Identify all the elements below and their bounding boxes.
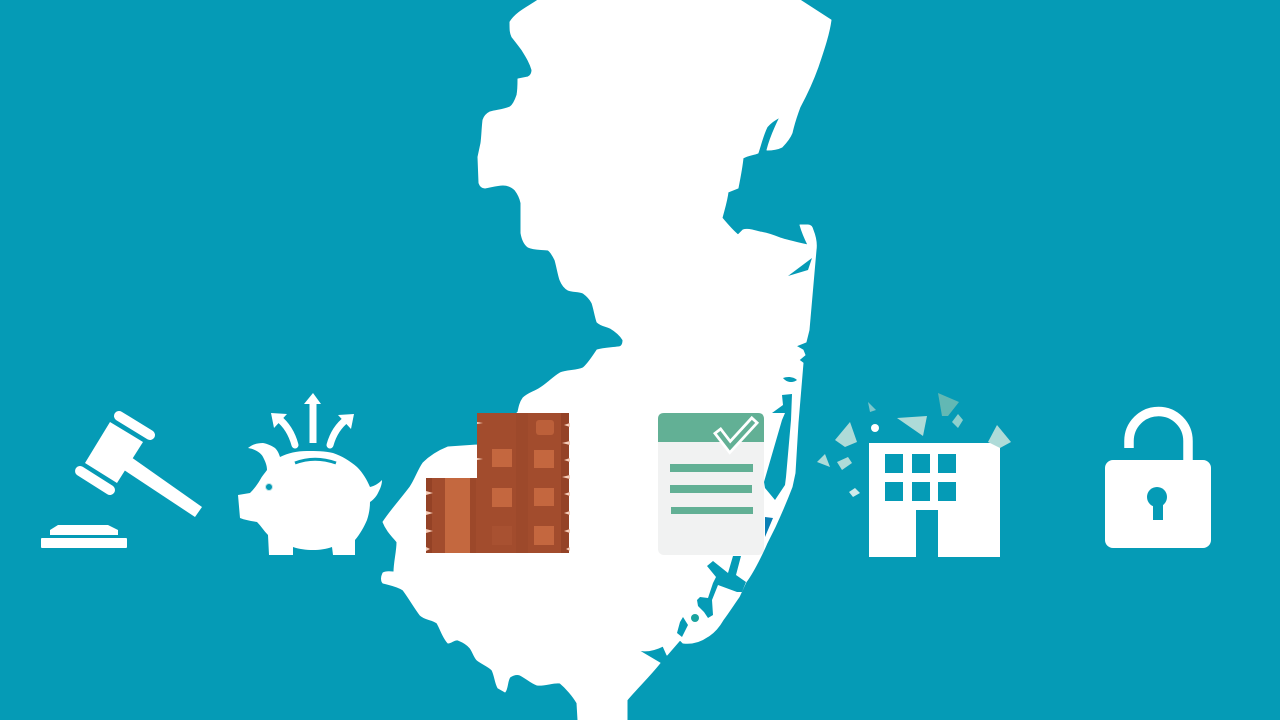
building dark edges	[426, 413, 569, 553]
icon: brick apartment building	[426, 413, 570, 553]
map inlet: marsh dot	[691, 614, 699, 622]
map: New Jersey	[382, 0, 831, 720]
icon: padlock	[1105, 412, 1211, 548]
building windows	[492, 420, 554, 545]
map inlet: small north bay	[783, 377, 797, 382]
piggy eye	[266, 484, 272, 490]
building shards	[817, 393, 1011, 497]
arrow: up	[304, 393, 321, 443]
arrow: up-right	[330, 414, 354, 445]
icon: checklist document	[658, 413, 764, 555]
piggy coin slot	[295, 459, 336, 463]
icon: crumbling building	[817, 393, 1011, 557]
padlock keyhole	[1147, 487, 1167, 520]
map inlet: Barnegat Bay	[764, 394, 792, 500]
map inlet: southern marsh	[677, 617, 688, 637]
document header	[658, 413, 764, 442]
map inlet: Great Bay	[697, 556, 746, 618]
map inlet: Little Egg Harbor	[765, 517, 773, 537]
building light stripe	[445, 478, 470, 553]
document check mark	[720, 423, 752, 447]
arrow: up-left	[271, 413, 295, 445]
building brick ticks	[426, 422, 570, 551]
map inlet: Shark River	[788, 258, 812, 276]
icon: piggy bank with arrows	[238, 393, 382, 555]
document lines	[670, 464, 753, 514]
icon: gavel	[41, 416, 202, 548]
